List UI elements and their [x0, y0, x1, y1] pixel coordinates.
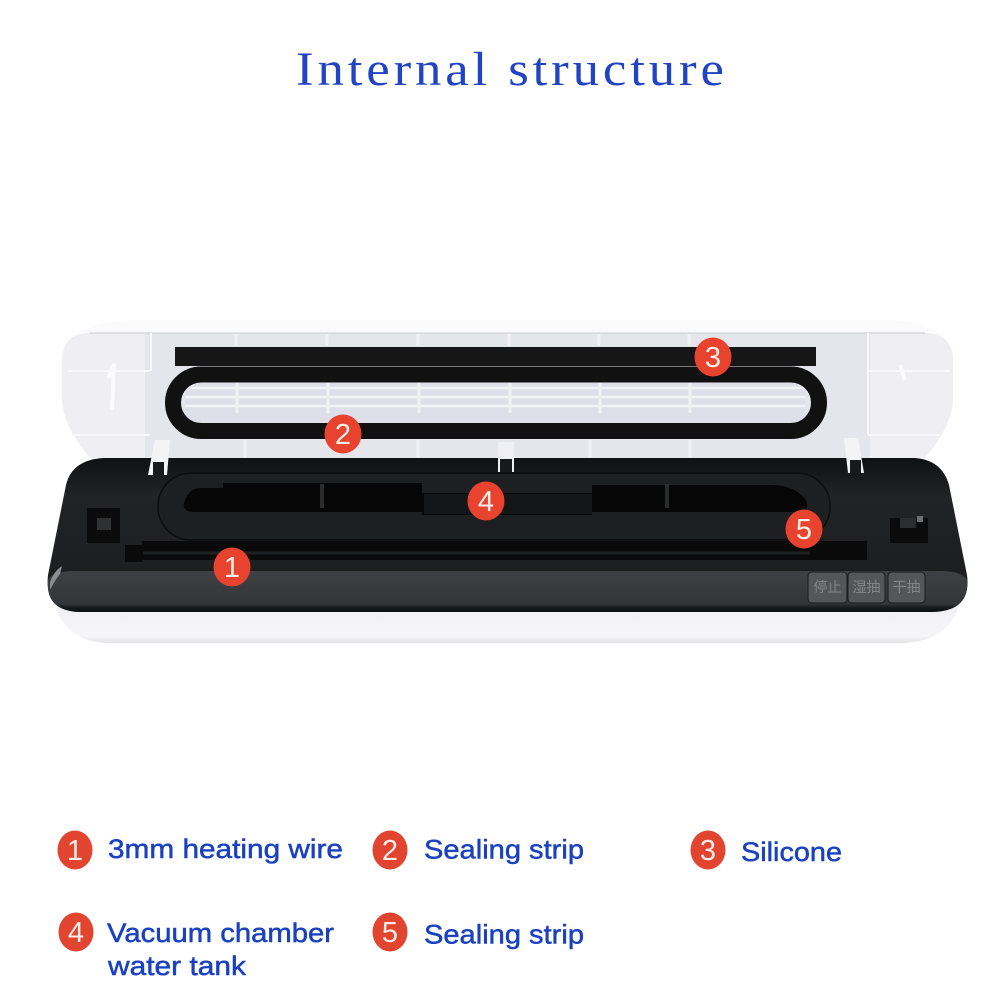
- water tank floor: [424, 494, 592, 514]
- control buttons: 停止: [814, 579, 842, 595]
- vacuum sealer device: [48, 320, 968, 643]
- marker 1: 1: [224, 552, 240, 584]
- front panel: [48, 571, 967, 612]
- hinges: [148, 438, 864, 475]
- legend 4: vacuum chamber water tank: Vacuum chamber: [107, 918, 334, 948]
- marker 5: 5: [796, 514, 812, 546]
- legend 3: silicone: Silicone: [741, 837, 842, 867]
- control buttons: 湿抽: [852, 579, 880, 595]
- marker 3: [694, 338, 732, 376]
- marker 4: [468, 482, 504, 520]
- chamber ribs: [322, 484, 667, 508]
- left clip: [87, 508, 120, 543]
- control buttons: 干抽: [892, 579, 920, 595]
- legend 2: sealing strip: [372, 830, 584, 870]
- corner highlight: [50, 566, 62, 590]
- dark base top: [48, 458, 968, 612]
- legend 1: 3mm heating wire: 3mm heating wire: [108, 834, 343, 864]
- open lid: [62, 320, 953, 458]
- marker 2: [324, 414, 362, 454]
- legend 4: vacuum chamber water tank: [58, 912, 334, 981]
- white lower body: [56, 608, 958, 643]
- legend 5: sealing strip: [372, 912, 584, 952]
- legend 1: 3mm heating wire: [58, 830, 343, 870]
- right clip: [890, 516, 928, 543]
- legend 2: sealing strip: 2: [382, 835, 398, 867]
- marker 1: [214, 548, 250, 586]
- marker 5: [786, 510, 822, 548]
- silicone bar: [175, 347, 816, 366]
- marker 3: 3: [705, 342, 721, 374]
- heating wire slot: [125, 541, 867, 562]
- title: Internal structure: [296, 42, 724, 95]
- marker 2: 2: [335, 419, 351, 451]
- legend 3: silicone: [690, 830, 842, 870]
- legend 1: 3mm heating wire: 1: [67, 835, 83, 867]
- legend 3: silicone: 3: [700, 835, 716, 867]
- legend 4: vacuum chamber water tank: 4: [68, 917, 84, 949]
- legend 2: sealing strip: Sealing strip: [424, 834, 584, 864]
- marker 4: 4: [478, 486, 494, 518]
- sealing strip loop: [173, 374, 819, 431]
- vacuum chamber cavity: [184, 483, 807, 515]
- legend 5: sealing strip: 5: [382, 917, 398, 949]
- control buttons: [808, 572, 925, 603]
- vacuum chamber gasket: [158, 473, 830, 540]
- heating wire: [143, 552, 810, 554]
- legend 5: sealing strip: Sealing strip: [424, 920, 584, 950]
- legend 4: vacuum chamber water tank: water tank: [107, 951, 247, 981]
